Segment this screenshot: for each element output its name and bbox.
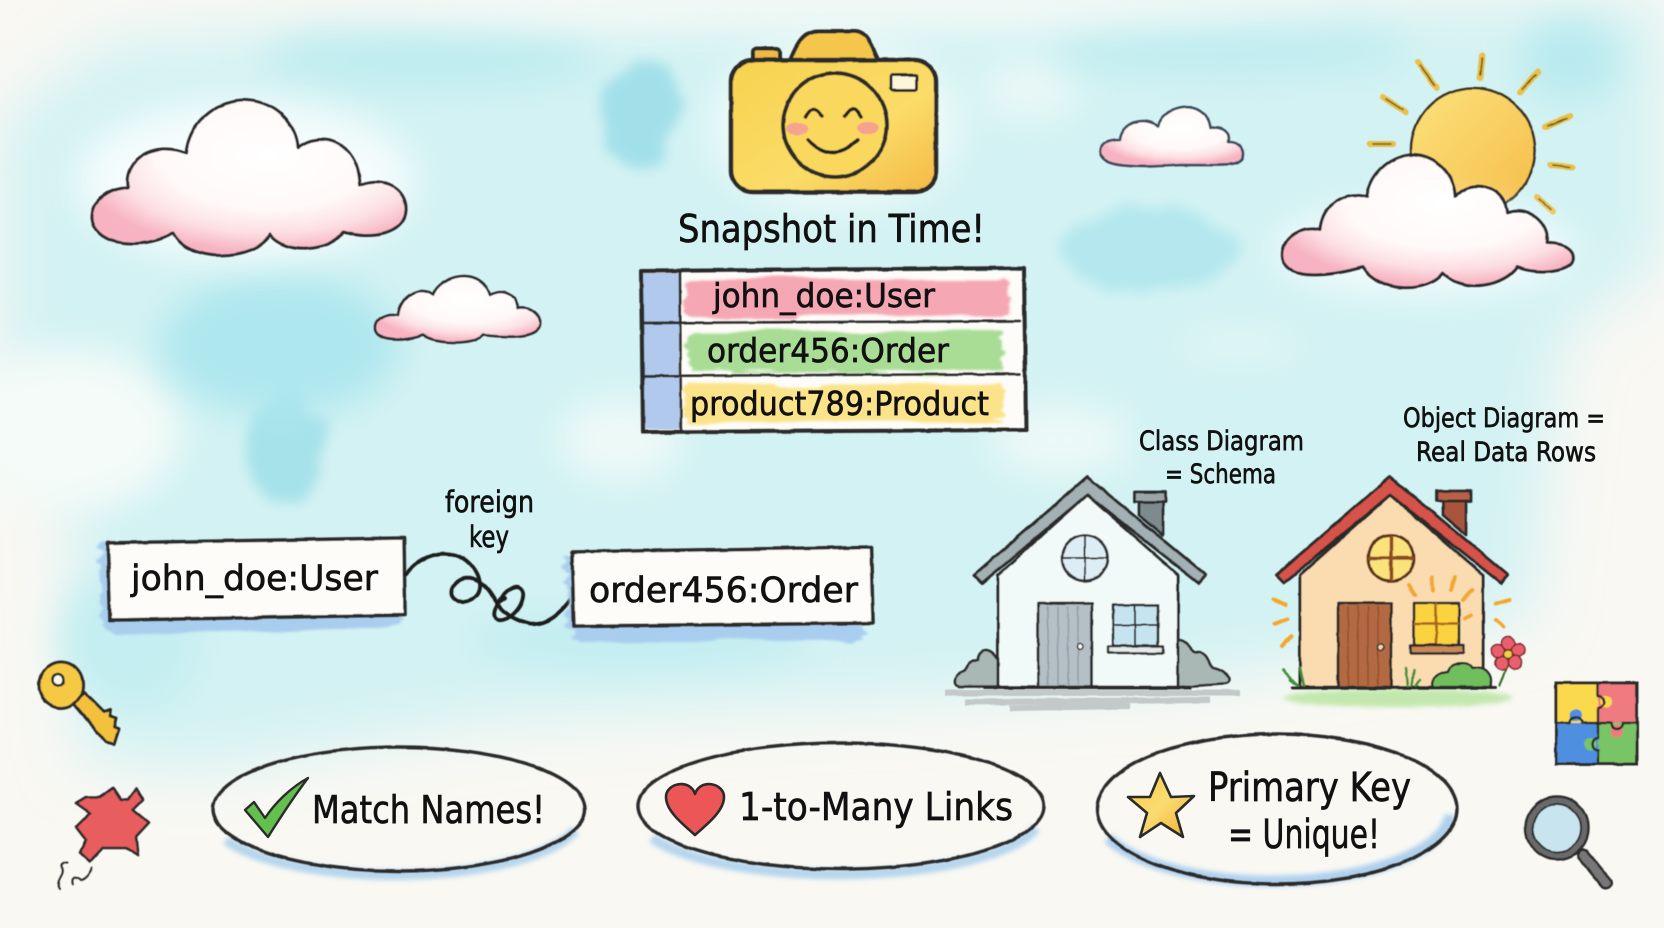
illustration: grey outline house (class diagram) [945,477,1240,708]
pill: Primary Key = Unique! [1097,734,1457,884]
icon: four colour puzzle [1556,683,1637,764]
pill: Primary Key = Unique!: = Unique! [1228,812,1380,858]
illustration: coloured glowing house (object diagram) [1273,477,1524,707]
table grid lines [641,268,1026,432]
box: order456:Order [565,547,873,642]
cloud: large pink cloud in front of sun [1275,155,1575,295]
pill: Match Names! [213,747,585,875]
box: order456:Order: order456:Order [589,571,859,611]
pill: Primary Key = Unique!: Primary Key [1208,765,1411,811]
icon: red heart [666,784,724,835]
box: john_doe:User [100,538,405,634]
arrow: tangled foreign key connector [406,554,572,624]
heading: Snapshot in Time!: Snapshot in Time! [678,207,985,251]
panel: object table with three rows [641,268,1026,432]
text: object diagram label [1403,403,1605,468]
icon: golden key [39,662,119,744]
cloud: small pink cloud top right [1100,107,1243,166]
cloud: large pink cloud top left [75,100,415,260]
icon: smiling yellow camera [710,31,960,210]
box: john_doe:User: john_doe:User [130,559,379,599]
text: foreign key label: foreign [445,485,534,519]
text: foreign key label: key [469,520,509,554]
icon: red puzzle piece with motion lines [58,788,149,889]
cloud: small pink cloud left [375,276,540,342]
text: object diagram label: Object Diagram = [1403,403,1605,434]
row: product789 highlight: product789:Product [690,384,989,423]
pill: 1-to-Many Links: 1-to-Many Links [739,785,1013,829]
row: john_doe highlight: john_doe:User [712,276,935,315]
text: foreign key label [445,485,534,554]
icon: magnifying glass [1526,796,1606,883]
text: object diagram label: Real Data Rows [1416,437,1596,468]
text: class diagram label: = Schema [1165,459,1276,490]
icon: gold star [1128,773,1194,837]
icon: green check mark [245,778,308,837]
text: class diagram label [1139,426,1304,490]
icon: sun with rays [1370,55,1572,212]
pill: 1-to-Many Links [638,743,1044,874]
text: class diagram label: Class Diagram [1139,426,1304,457]
row: order456 highlight: order456:Order [707,331,949,370]
pill: Match Names!: Match Names! [312,788,545,832]
